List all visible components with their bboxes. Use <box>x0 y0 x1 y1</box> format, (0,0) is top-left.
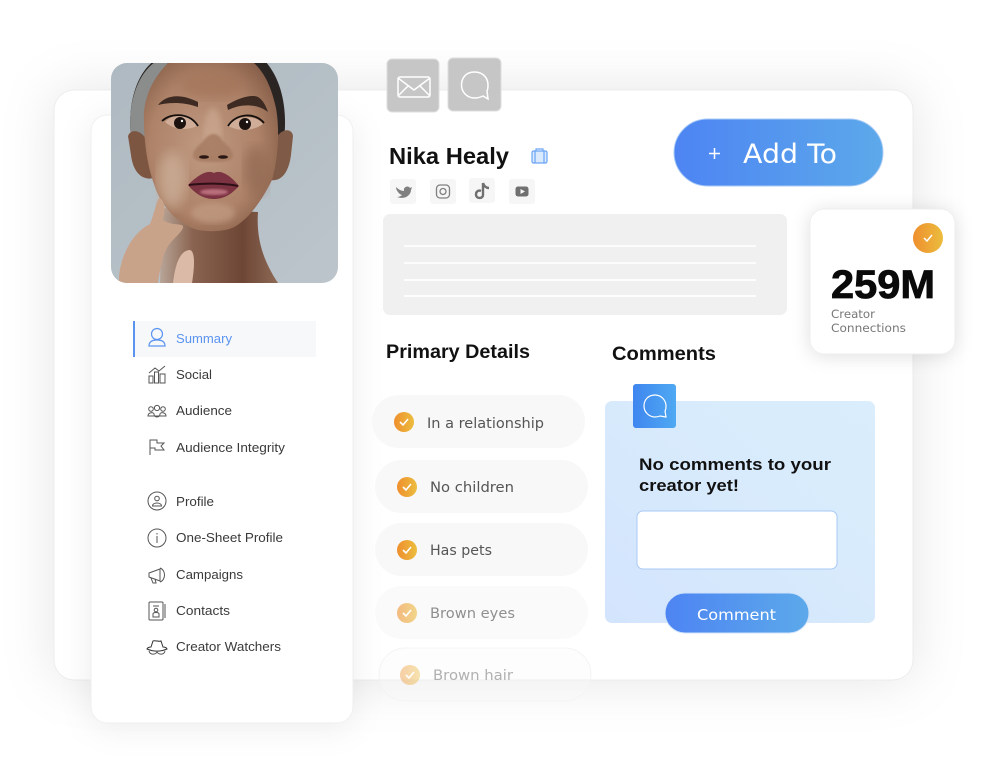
heading: comments: Comments <box>612 344 716 365</box>
icon: tiktok <box>469 178 495 203</box>
nav item: summary <box>133 321 316 357</box>
icon: chat tile <box>448 58 501 111</box>
icon: briefcase <box>532 149 547 163</box>
pill: has pets <box>375 523 588 576</box>
panel: comments <box>605 384 875 633</box>
icon: instagram <box>430 179 456 204</box>
social icons <box>390 178 535 204</box>
panel: comments: No comments to your <box>639 455 831 474</box>
pill: in a relationship <box>372 395 585 448</box>
panel: comments: creator yet! <box>639 476 739 495</box>
stat card: creator connections: Connections <box>831 321 906 335</box>
pill: no children: No children <box>430 480 514 496</box>
nav item: one-sheet profile <box>148 529 283 547</box>
heading: creator name: Nika Healy <box>389 143 509 169</box>
comment input <box>637 511 837 569</box>
add to button: Add To <box>743 139 837 170</box>
nav item: summary: Summary <box>176 331 232 346</box>
stat card: creator connections: Creator <box>831 307 875 321</box>
heading: primary details: Primary Details <box>386 342 530 363</box>
add to button <box>674 119 883 186</box>
nav item: contacts <box>149 602 231 620</box>
icon: youtube <box>509 179 535 204</box>
comment button <box>665 593 809 633</box>
pill: no children <box>375 460 588 513</box>
comment button: Comment <box>697 606 776 624</box>
nav item: campaigns <box>149 567 243 583</box>
icon: comment tile <box>633 384 676 428</box>
pill: brown hair <box>379 648 591 701</box>
icon: twitter <box>390 179 416 204</box>
nav item: profile: Profile <box>176 494 214 509</box>
nav item: campaigns: Campaigns <box>176 567 243 582</box>
pill: in a relationship: In a relationship <box>427 416 544 432</box>
nav item: social <box>149 366 212 383</box>
nav item: audience: Audience <box>176 403 232 418</box>
pill: brown eyes: Brown eyes <box>430 606 515 622</box>
bio placeholder panel <box>383 214 787 315</box>
nav item: audience integrity: Audience Integrity <box>176 440 286 455</box>
pill: brown eyes <box>375 586 588 639</box>
nav item: one-sheet profile: One-Sheet Profile <box>176 530 283 545</box>
nav item: profile <box>148 492 214 510</box>
pill: brown hair: Brown hair <box>433 668 513 684</box>
profile portrait <box>111 58 338 283</box>
icon: mail tile <box>387 59 439 112</box>
nav item: contacts: Contacts <box>176 603 231 618</box>
icon: check badge <box>913 223 943 253</box>
detail pills <box>372 395 591 701</box>
panel: left navigation <box>91 58 353 723</box>
nav item: social: Social <box>176 367 212 382</box>
nav item: creator watchers: Creator Watchers <box>176 639 282 654</box>
stat card: creator connections <box>810 209 955 354</box>
main card <box>54 90 913 680</box>
pill: has pets: Has pets <box>430 543 492 559</box>
nav item: audience <box>148 403 232 418</box>
stat card: creator connections: 259M <box>831 263 935 307</box>
